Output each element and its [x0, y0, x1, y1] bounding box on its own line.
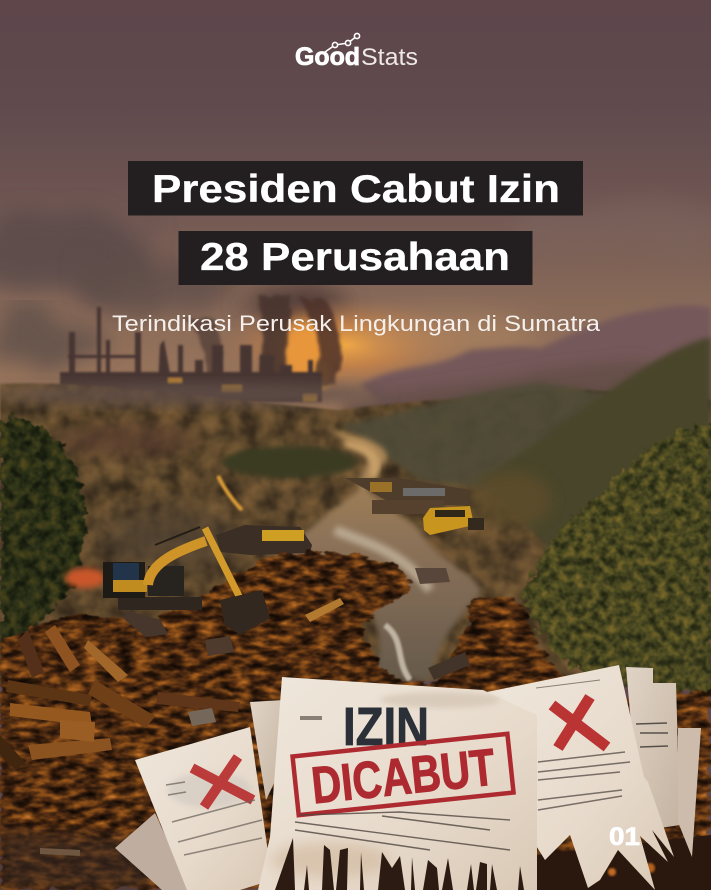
heavy machinery on the riverbank — [216, 476, 484, 555]
title line 2: 28 Perusahaan — [200, 236, 510, 279]
left foreground tree — [0, 418, 86, 655]
document sheet with red X, right — [487, 665, 674, 890]
document sheet with red X, left — [135, 727, 272, 890]
title line 2 — [178, 231, 532, 285]
torn bottom strips — [275, 838, 524, 890]
background sky — [0, 0, 711, 420]
factory silhouettes — [60, 307, 322, 402]
heading IZIN: IZIN — [343, 697, 429, 757]
yellow excavator — [65, 527, 270, 635]
distant mountains — [340, 305, 711, 440]
main document "IZIN DICABUT" — [258, 677, 537, 890]
logo GoodStats — [295, 33, 418, 71]
subtitle: Terindikasi Perusak Lingkungan di Sumatra — [112, 311, 601, 336]
title line 1 — [128, 161, 583, 216]
red X mark left — [192, 757, 253, 807]
back document sheets right — [626, 667, 701, 857]
debris ground — [0, 551, 711, 890]
valley hillsides — [0, 337, 711, 680]
title line 1: Presiden Cabut Izin — [152, 168, 560, 211]
mist over the tree line — [0, 383, 390, 405]
red X mark right — [552, 697, 607, 748]
stamp DICABUT: DICABUT — [309, 739, 498, 815]
page number: 01 — [609, 823, 640, 851]
river — [285, 428, 482, 680]
document sheet corner, lower left — [115, 813, 190, 890]
document sheet back-left — [250, 700, 284, 800]
logs and rocks — [0, 568, 711, 890]
smoke clouds — [0, 200, 711, 365]
logo GoodStats: Good — [295, 43, 360, 71]
logo GoodStats: Stats — [361, 44, 418, 71]
right foreground tree — [522, 425, 711, 695]
fire glow at horizon — [185, 296, 540, 393]
